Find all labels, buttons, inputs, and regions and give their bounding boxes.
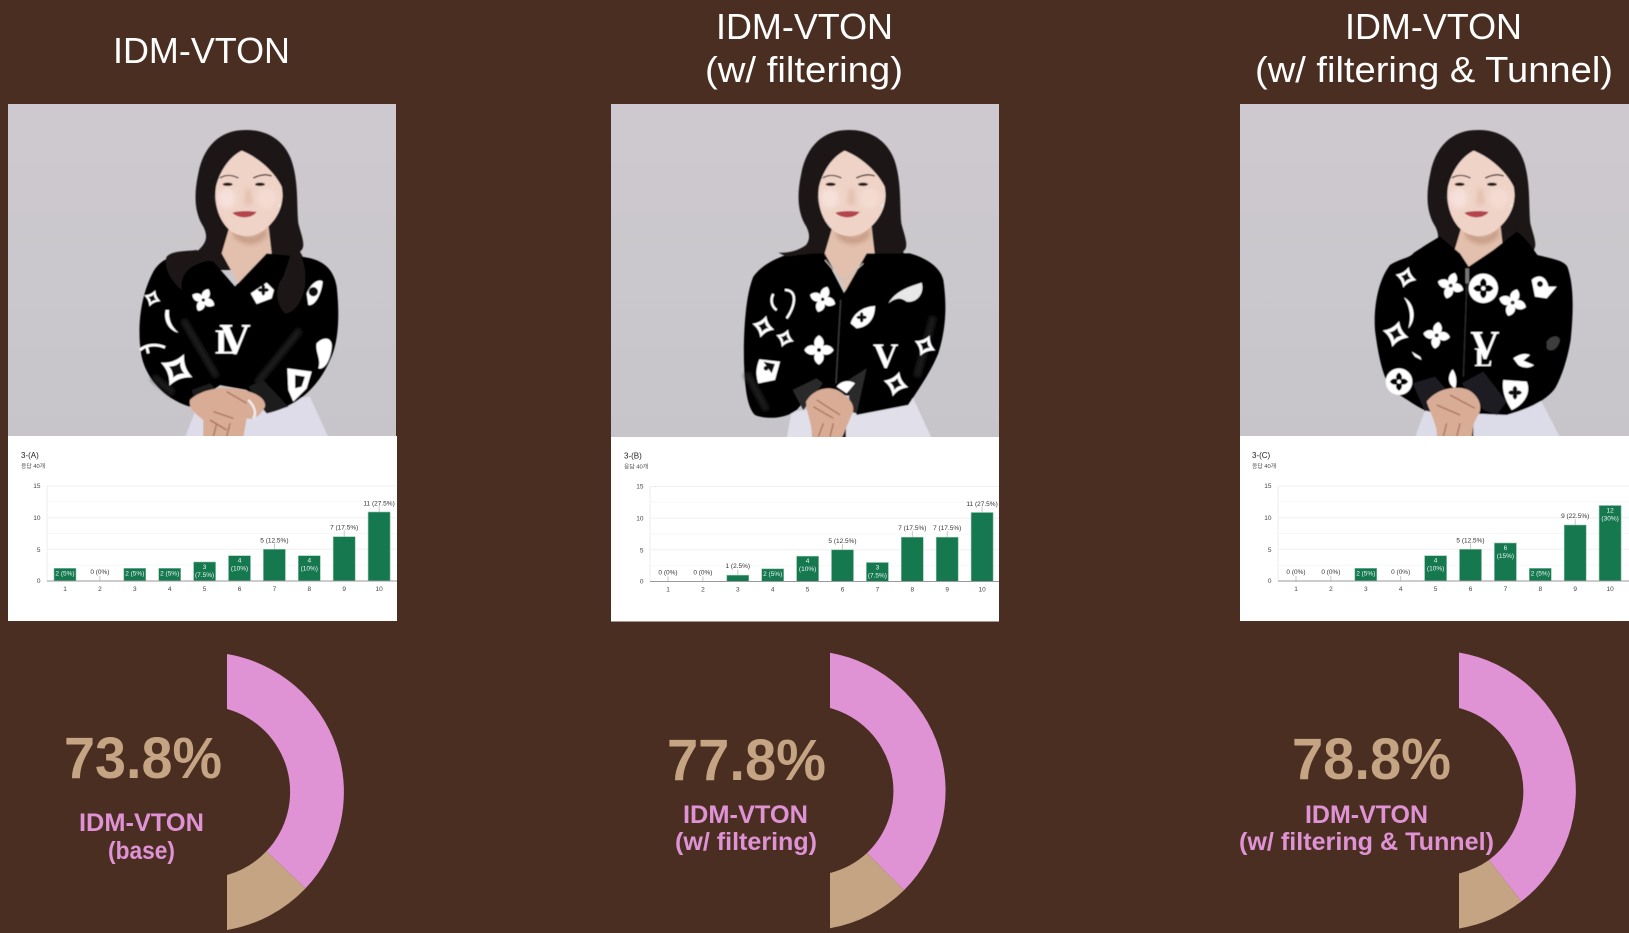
bar chart: 3-(A): 8 (307, 586, 311, 593)
score: 78.8%: 78.8% (1292, 727, 1451, 792)
bar chart: 3-(A): 9 (342, 586, 346, 593)
bar chart: 3-(A): 5 (37, 547, 41, 554)
bar chart: 3-(C): 0 (0%) (1321, 569, 1340, 576)
bar chart: 3-(A): (10%) (301, 566, 318, 573)
bar chart: 3-(A): 15 (33, 483, 41, 490)
bar chart: 3-(C): 0 (0%) (1391, 569, 1410, 576)
bar chart: 3-(C): 2 (5%) (1531, 570, 1550, 578)
bar chart: 3-(A): 2 (5%) (160, 570, 179, 578)
bar chart: 3-(C): 6 (1469, 586, 1473, 593)
label: IDM-VTON (w/ filtering): (w/ filtering) (675, 828, 817, 856)
bar chart: 3-(B): 2 (701, 586, 705, 594)
heading: IDM-VTON (w/ filtering & Tunnel): IDM-VTON (1345, 6, 1522, 47)
bar chart: 3-(B): (7.5%) (868, 572, 887, 580)
bar chart: 3-(A): 2 (98, 586, 102, 593)
bar chart: 3-(A): 1 (63, 586, 67, 593)
donut gauge: 78.8% (1459, 652, 1576, 928)
bar chart: 3-(A): 2 (5%) (55, 570, 75, 578)
bar chart: 3-(B): 2 (5%) (763, 571, 782, 578)
bar chart: 3-(C): 10 (1264, 515, 1272, 522)
label: IDM-VTON (w/ filtering & Tunnel) (1239, 801, 1494, 856)
heading: IDM-VTON (w/ filtering) (705, 6, 903, 90)
bar chart: 3-(C): 1 (1294, 586, 1298, 593)
panel: IDM-VTON with filtering and Tunnel (1239, 6, 1629, 928)
label: IDM-VTON (w/ filtering & Tunnel): (w/ filtering & Tunnel) (1239, 828, 1494, 856)
bar chart: 3-(C): 2 (1329, 586, 1333, 593)
heading: IDM-VTON: IDM-VTON (113, 30, 290, 71)
label: IDM-VTON (w/ filtering): IDM-VTON (683, 801, 808, 829)
bar chart: 3-(A): 4 (238, 558, 242, 565)
photo: filtered and Tunnel try-on result: L (1474, 342, 1492, 372)
bar chart: 3-(A): 7 (17.5%) (330, 525, 358, 532)
bar chart: 3-(C): 4 (1434, 558, 1438, 565)
bar chart: 3-(B): 15 (636, 484, 644, 490)
heading: IDM-VTON (w/ filtering): IDM-VTON (716, 6, 893, 47)
donut gauge: 73.8% (227, 654, 344, 930)
bar chart: 3-(A): 6 (238, 586, 242, 593)
bar chart: 3-(A): 3 (133, 586, 137, 593)
label: IDM-VTON (base): IDM-VTON (79, 809, 204, 837)
photo: base try-on result: L (215, 322, 238, 361)
bar chart: 3-(A): 10 (33, 515, 41, 522)
bar chart: 3-(C): 2 (5%) (1356, 570, 1375, 578)
photo: filtered try-on result: V (873, 336, 898, 375)
photo: filtered and Tunnel try-on result: V (1471, 322, 1500, 367)
bar chart: 3-(C): (30%) (1601, 516, 1619, 522)
bar chart: 3-(A) (8, 436, 397, 621)
bar chart: 3-(C): 9 (22.5%) (1561, 513, 1589, 520)
bar chart: 3-(C): 응답 40개 (1252, 462, 1276, 470)
bar chart: 3-(B): 3 (736, 586, 740, 594)
bar chart: 3-(C): (15%) (1497, 553, 1514, 560)
label: IDM-VTON (w/ filtering) (675, 801, 817, 856)
photo: base try-on result: V (219, 315, 251, 363)
bar chart: 3-(A): 3-(A) (21, 451, 39, 460)
bar chart: 3-(C): 5 (1268, 547, 1272, 554)
bar chart: 3-(C) (1240, 436, 1629, 621)
bar chart: 3-(B): 8 (910, 586, 914, 594)
bar chart: 3-(C): 5 (1434, 586, 1438, 593)
label: IDM-VTON (w/ filtering & Tunnel): IDM-VTON (1305, 801, 1428, 829)
panel: IDM-VTON with filtering (611, 6, 999, 928)
bar chart: 3-(B): 11 (27.5%) (966, 501, 998, 508)
panel: IDM-VTON base (8, 30, 397, 930)
heading: IDM-VTON (w/ filtering & Tunnel): (w/ filtering & Tunnel) (1255, 49, 1613, 90)
score: 73.8%: 73.8% (64, 726, 222, 791)
bar chart: 3-(A): 5 (12.5%) (260, 537, 288, 544)
bar chart: 3-(A): 4 (307, 558, 311, 565)
bar chart: 3-(C): 3 (1364, 586, 1368, 593)
label: IDM-VTON (base): (base) (108, 837, 175, 865)
bar chart: 3-(C): 3-(C) (1252, 451, 1271, 460)
bar chart: 3-(B): 7 (17.5%) (933, 525, 961, 532)
label: IDM-VTON (base) (79, 809, 204, 865)
bar chart: 3-(B): 9 (945, 586, 949, 594)
bar chart: 3-(B): 1 (666, 586, 670, 594)
bar chart: 3-(B): 7 (17.5%) (898, 525, 926, 532)
bar chart: 3-(B): 10 (636, 516, 644, 522)
bar chart: 3-(C): 8 (1538, 586, 1542, 593)
bar chart: 3-(B): 10 (978, 586, 986, 594)
bar chart: 3-(B): 3-(B) (624, 452, 642, 460)
bar chart: 3-(A): 2 (5%) (125, 570, 144, 578)
bar chart: 3-(B): (10%) (799, 566, 816, 573)
bar chart: 3-(B): 응답 40개 (624, 462, 648, 470)
bar chart: 3-(B): 7 (876, 586, 880, 594)
score: 77.8%: 77.8% (667, 728, 826, 793)
bar chart: 3-(A): 0 (37, 578, 41, 585)
bar chart: 3-(A): 11 (27.5%) (363, 500, 395, 508)
bar chart: 3-(C): 5 (12.5%) (1456, 537, 1485, 544)
photo: filtered and Tunnel try-on result (1240, 104, 1629, 437)
bar chart: 3-(C): (10%) (1427, 566, 1444, 573)
bar chart: 3-(A): 7 (273, 586, 277, 593)
bar chart: 3-(C): 10 (1606, 586, 1614, 593)
bar chart: 3-(B): 0 (0%) (658, 570, 678, 576)
bar chart: 3-(C): 7 (1504, 586, 1508, 593)
bar chart: 3-(B): 1 (2.5%) (726, 563, 750, 570)
bar chart: 3-(B): 0 (640, 578, 644, 586)
bar chart: 3-(C): 15 (1264, 483, 1272, 490)
bar chart: 3-(B): 5 (806, 586, 810, 594)
bar chart: 3-(B): 5 (640, 548, 644, 554)
donut gauge: 77.8% (830, 653, 946, 928)
bar chart: 3-(B): 3 (876, 564, 880, 572)
bar chart: 3-(A): 3 (203, 564, 207, 571)
photo: base try-on result (8, 104, 396, 437)
photo: filtered try-on result (611, 104, 999, 438)
bar chart: 3-(A): 5 (203, 586, 207, 593)
bar chart: 3-(B): 4 (806, 558, 810, 565)
bar chart: 3-(C): 6 (1504, 545, 1508, 552)
bar chart: 3-(C): 9 (1573, 586, 1577, 593)
bar chart: 3-(C): 12 (1606, 508, 1614, 514)
bar chart: 3-(A): (10%) (231, 566, 248, 573)
bar chart: 3-(A): 10 (375, 586, 383, 593)
heading: IDM-VTON (w/ filtering): (w/ filtering) (705, 49, 903, 90)
bar chart: 3-(B): 0 (0%) (693, 570, 712, 576)
heading: IDM-VTON (w/ filtering & Tunnel) (1255, 6, 1613, 90)
bar chart: 3-(B) (611, 437, 999, 622)
bar chart: 3-(C): 0 (0%) (1286, 569, 1306, 576)
bar chart: 3-(C): 0 (1268, 578, 1272, 585)
bar chart: 3-(A): 0 (0%) (90, 569, 109, 576)
bar chart: 3-(A): 응답 40개 (21, 462, 45, 470)
bar chart: 3-(A): (7.5%) (195, 572, 214, 579)
bar chart: 3-(B): 5 (12.5%) (828, 538, 857, 545)
bar chart: 3-(A): 4 (168, 586, 172, 593)
bar chart: 3-(B): 4 (771, 586, 775, 594)
bar chart: 3-(C): 4 (1399, 586, 1403, 593)
bar chart: 3-(B): 6 (841, 586, 845, 594)
